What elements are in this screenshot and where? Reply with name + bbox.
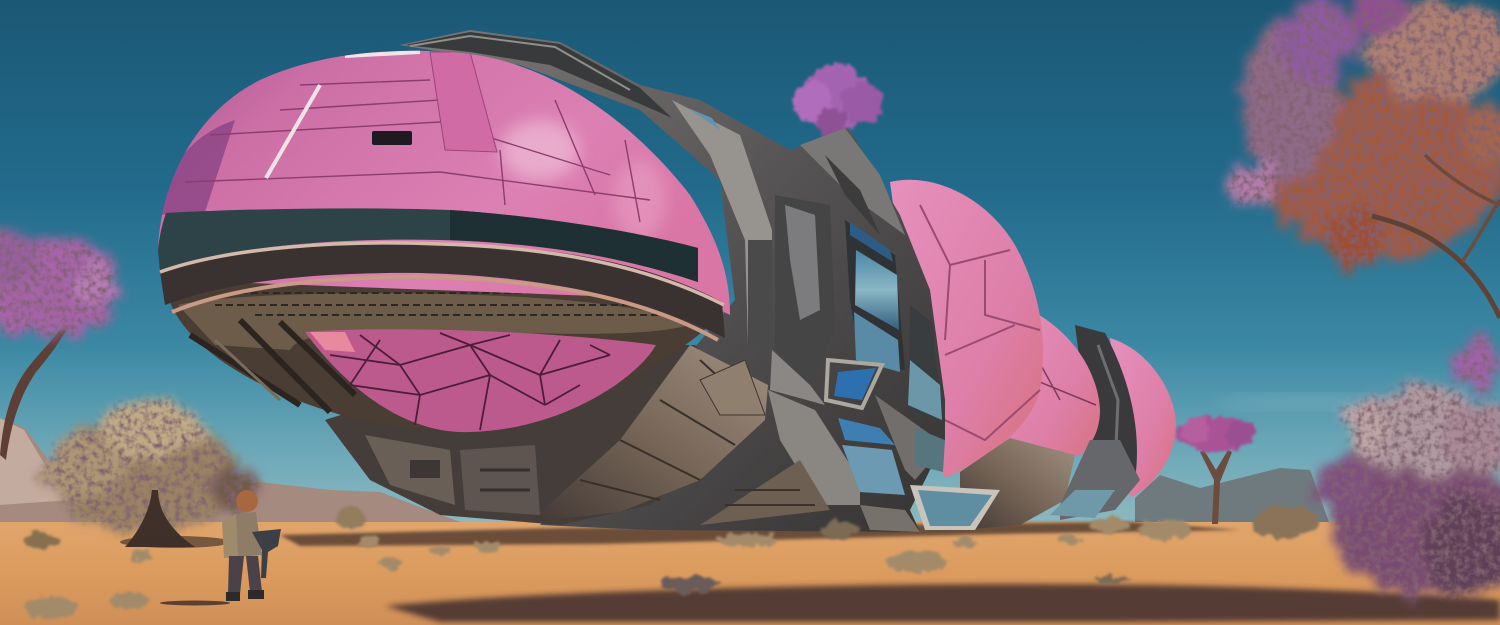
spacecraft: [158, 30, 1176, 532]
desert sand ground: [0, 522, 1500, 625]
front pod pink dome: [158, 51, 730, 315]
small tree behind the hull: [792, 64, 883, 142]
desert shrubs: [24, 505, 1317, 619]
large upper-right tree: [1229, 0, 1500, 318]
bush: left dry tan tree: [45, 400, 257, 548]
rear pod far: [1060, 325, 1176, 515]
distant mountains: [0, 418, 1330, 530]
lower curved hull: [325, 345, 830, 525]
lower-right purple bush: [1315, 336, 1500, 595]
rear lower machinery: [960, 438, 1140, 530]
ship contact shadow: [280, 522, 1240, 546]
central windows: [826, 220, 942, 420]
central machinery body: [400, 30, 1000, 532]
long ground shadow: [385, 584, 1500, 622]
wispy clouds: [1215, 396, 1405, 408]
rear pod middle: [1000, 310, 1100, 470]
tree: far-left purple: [0, 230, 120, 460]
hatch: [372, 131, 412, 145]
front pod underside bowl: [165, 280, 725, 432]
distant purple tree right of ship: [1175, 416, 1255, 524]
rear pod large: [890, 180, 1043, 478]
astronaut figure: [160, 490, 281, 606]
dark equatorial band: [158, 208, 725, 340]
